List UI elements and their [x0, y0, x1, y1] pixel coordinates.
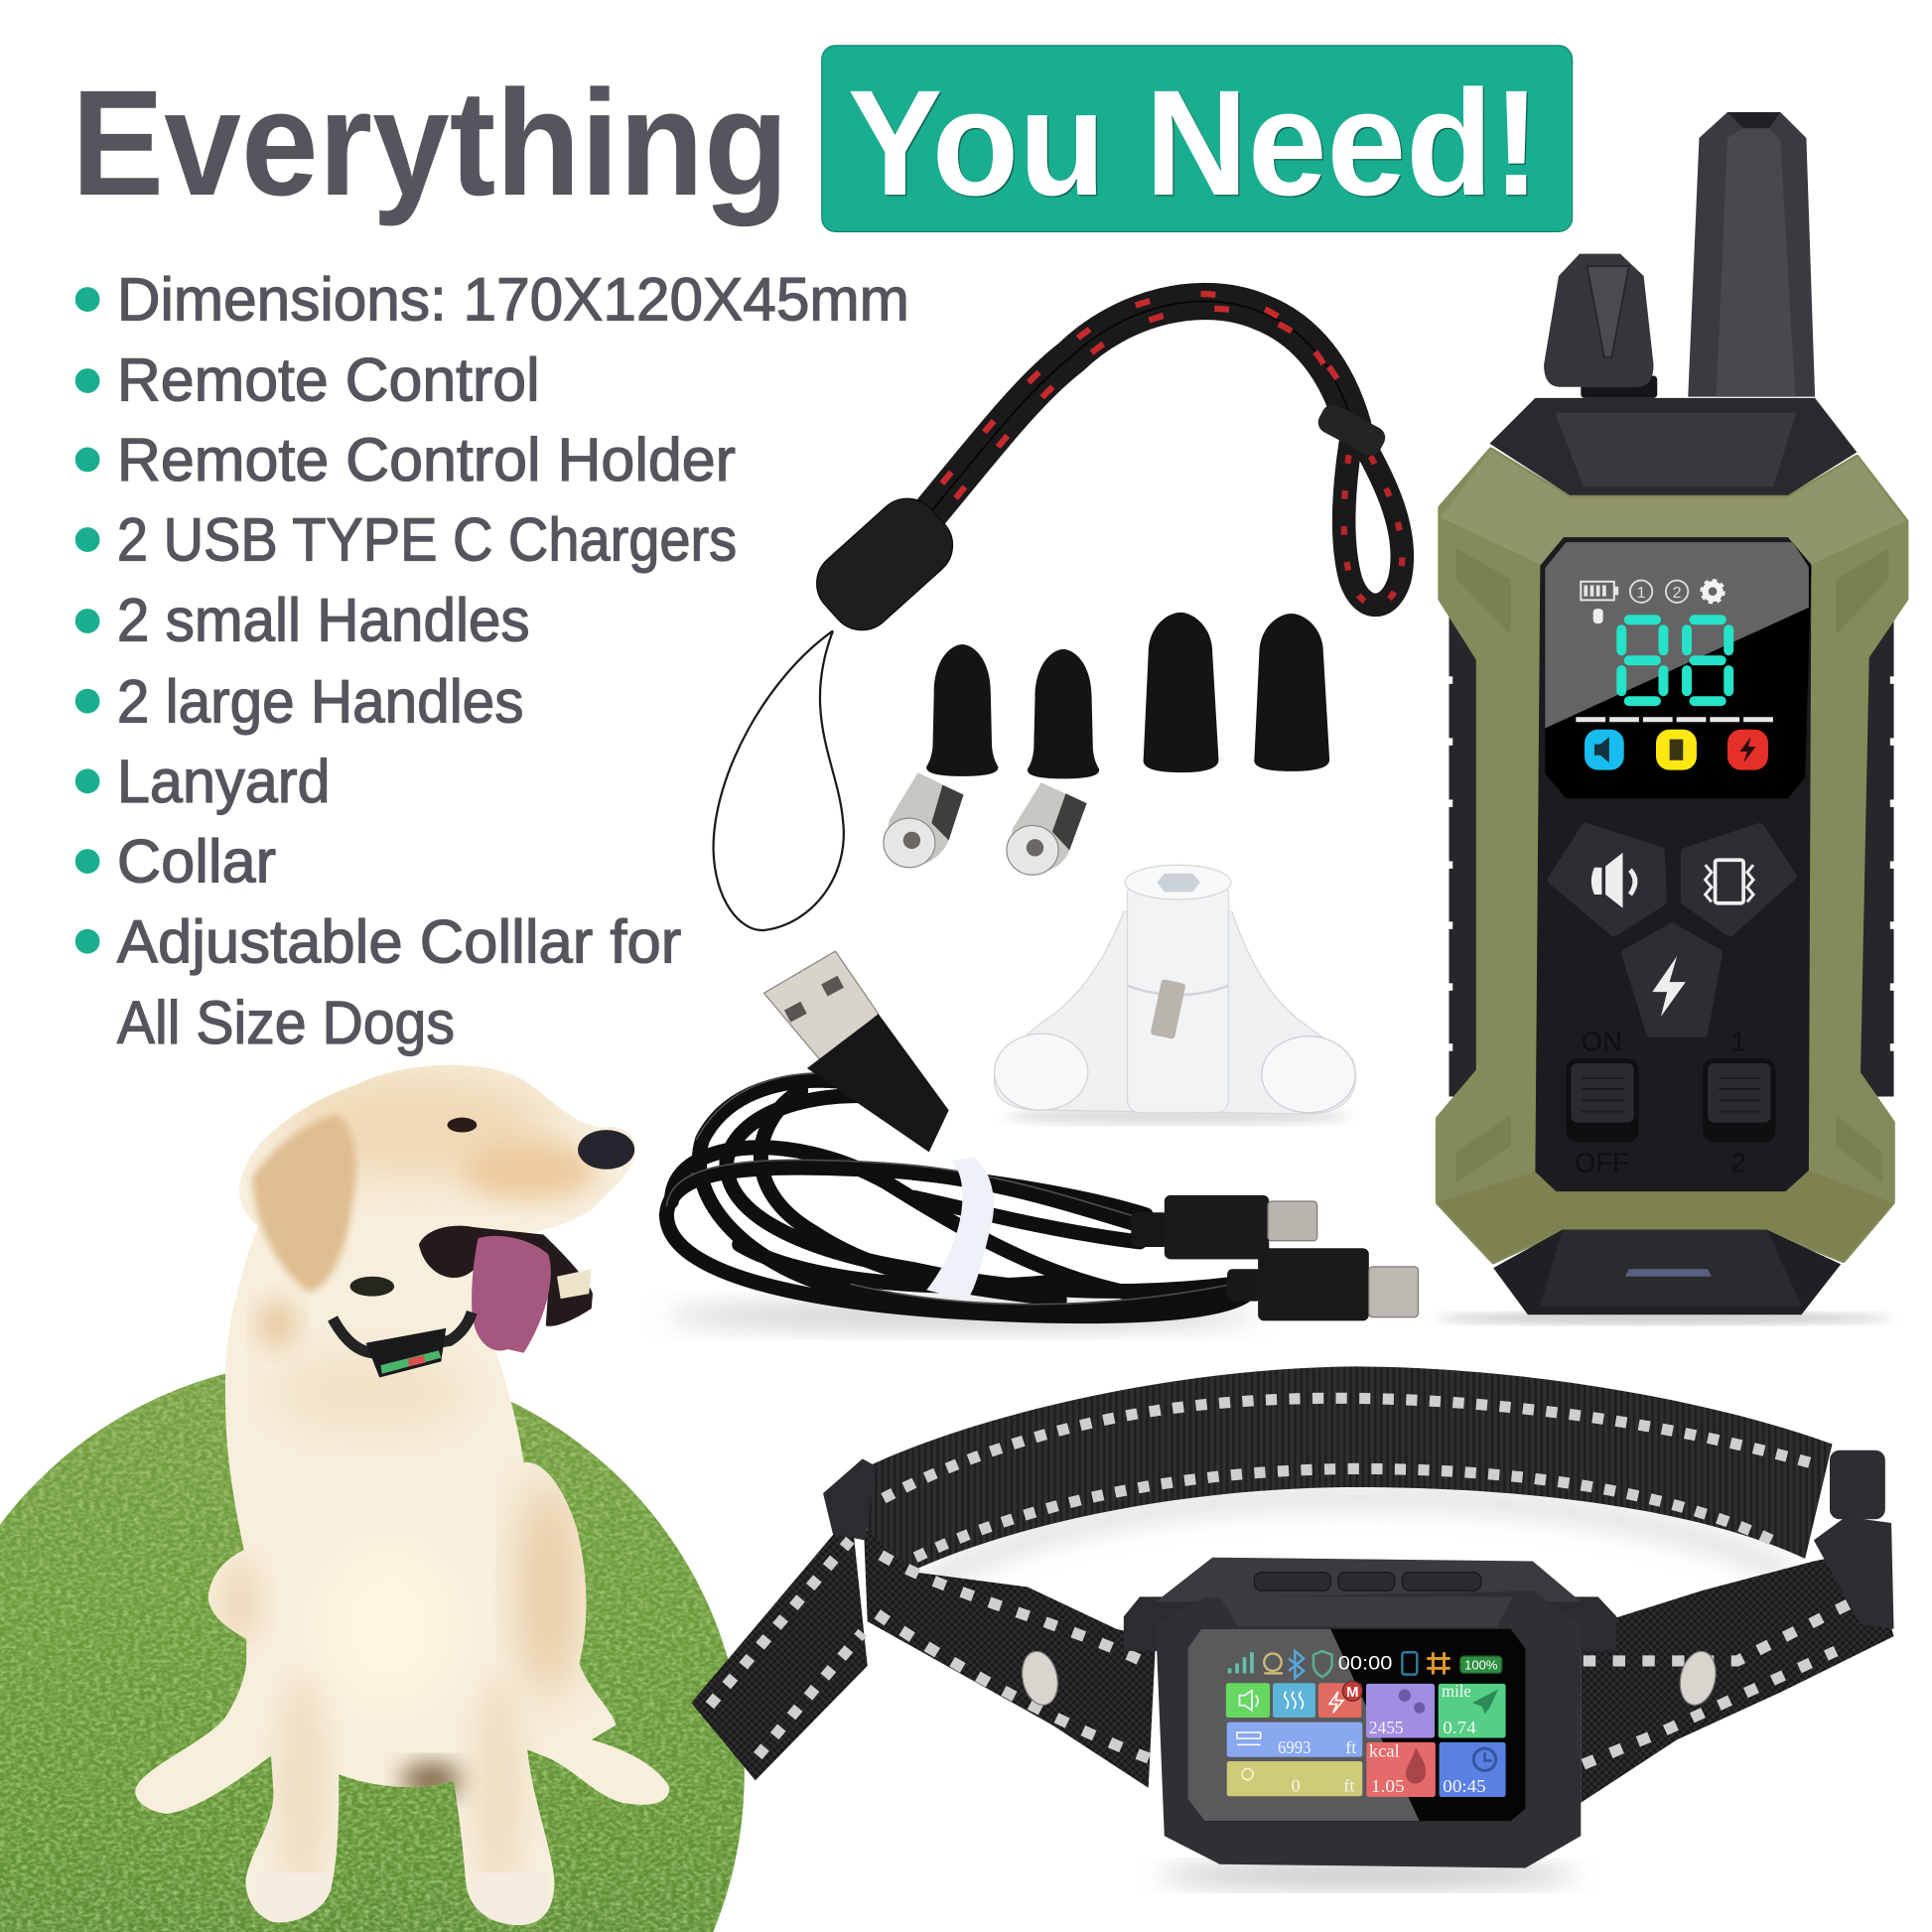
screen gloss — [1182, 1624, 1420, 1821]
tile: calories — [1366, 1740, 1436, 1797]
tile: range — [1227, 1723, 1362, 1757]
dial knob — [1544, 254, 1657, 398]
top buttons — [1254, 1573, 1481, 1590]
USB-C plug 2 — [1227, 1248, 1418, 1320]
contents list — [75, 266, 909, 1056]
channel 2 icon — [1666, 581, 1688, 603]
shield icon — [1313, 1651, 1332, 1677]
top housing — [1156, 1558, 1581, 1601]
vibrate button — [1686, 828, 1792, 931]
grass circle — [0, 1360, 745, 1932]
tile: calories: 1.05 — [1371, 1776, 1405, 1796]
contents list: Lanyard — [117, 748, 331, 815]
remote shadow — [1436, 1312, 1891, 1324]
dog teeth — [557, 1269, 592, 1299]
dog mouth — [419, 1226, 593, 1326]
contents list: Adjustable Colllar for — [117, 907, 681, 975]
channel switch: 1 — [1731, 1027, 1746, 1057]
antenna — [1688, 112, 1815, 397]
contents list: Remote Control — [117, 345, 540, 413]
channel 1 icon — [1630, 581, 1652, 603]
lanyard tag — [803, 485, 966, 643]
dog collar — [333, 1312, 472, 1378]
left buckle — [823, 1458, 876, 1540]
dog collar product — [691, 1366, 1894, 1886]
remote control holder — [994, 865, 1355, 1125]
LCD screen — [1545, 542, 1811, 798]
dog nose — [578, 1130, 634, 1170]
88 seven-segment display — [1621, 620, 1728, 701]
power switch — [1566, 1027, 1639, 1177]
shock button — [1626, 928, 1718, 1033]
tile: timer — [1440, 1742, 1506, 1797]
silicone handles: 2 small, 2 large — [926, 613, 1329, 778]
tile: distance: mile — [1442, 1681, 1471, 1701]
screen gloss — [1545, 542, 1809, 728]
black faceplate — [1535, 537, 1811, 1191]
battery 100% — [1460, 1656, 1502, 1673]
tile: range: 6993 — [1278, 1737, 1311, 1757]
battery icon — [1581, 582, 1616, 600]
dog ear — [252, 1115, 356, 1292]
power switch: OFF — [1575, 1147, 1629, 1177]
top cap — [1489, 398, 1857, 495]
contents list: 2 large Handles — [117, 667, 523, 735]
channel switch: 2 — [1731, 1147, 1746, 1177]
device body — [1156, 1590, 1581, 1867]
mode icon: vibrate — [1656, 730, 1697, 770]
tile: timer: 00:45 — [1443, 1776, 1486, 1796]
contents list: Remote Control Holder — [117, 426, 736, 493]
location icon — [1264, 1654, 1283, 1673]
cable coils — [666, 1080, 1244, 1316]
metal nuts — [884, 772, 1087, 875]
USB-C plug 1 — [1131, 1195, 1317, 1259]
tile: steps: 2455 — [1369, 1718, 1404, 1737]
mode icon: shock — [1727, 730, 1768, 770]
cable tie — [926, 1157, 994, 1300]
right strap — [1581, 1550, 1894, 1803]
golden retriever photo — [135, 1065, 669, 1928]
side grips — [1447, 604, 1896, 1097]
olive body shell — [1438, 450, 1906, 1262]
channel 1 icon: 1 — [1637, 584, 1646, 602]
device shadow — [1159, 1864, 1578, 1886]
tile: steps — [1366, 1684, 1435, 1738]
tile: distance — [1439, 1681, 1506, 1738]
side lugs — [1124, 1596, 1616, 1651]
contents list: 2 USB TYPE C Chargers — [117, 506, 737, 574]
lanyard slider — [1314, 401, 1389, 460]
USB-A plug — [763, 951, 879, 1062]
device screen — [1182, 1624, 1525, 1821]
tile: distance: 0.74 — [1443, 1718, 1476, 1737]
left strap — [864, 1528, 1156, 1788]
collar device — [1124, 1558, 1616, 1867]
mode icon: sound — [1585, 730, 1624, 770]
tile: location: ft — [1343, 1776, 1354, 1796]
back strap — [863, 1366, 1832, 1571]
loose strap end — [691, 1513, 868, 1780]
contents list: All Size Dogs — [117, 989, 455, 1056]
settings gear icon — [1702, 581, 1724, 603]
contents list: 2 small Handles — [117, 586, 530, 653]
contents list: Collar — [117, 828, 276, 896]
tile: location: 0 — [1292, 1776, 1301, 1796]
bottom cap — [1493, 1230, 1841, 1314]
clock readout: 00:00 — [1338, 1653, 1392, 1675]
right snap — [1676, 1648, 1721, 1709]
tile: sound — [1226, 1683, 1270, 1718]
lanyard — [714, 294, 1402, 930]
indicator light — [1625, 1269, 1712, 1277]
bluetooth icon — [1289, 1651, 1304, 1678]
dog eye — [448, 1118, 477, 1133]
collar shadow — [918, 1497, 1787, 1589]
channel switch — [1703, 1027, 1775, 1177]
level bar — [1576, 718, 1775, 722]
tile: vibrate — [1273, 1683, 1315, 1718]
heading: Everything: Everything — [71, 60, 788, 227]
tile: shock — [1318, 1681, 1362, 1718]
power switch: ON — [1582, 1027, 1622, 1057]
speaker button — [1553, 828, 1662, 931]
back strap stitching — [884, 1398, 1814, 1558]
tile: shock: M — [1346, 1685, 1359, 1701]
channel 2 icon: 2 — [1673, 584, 1682, 602]
tile: calories: kcal — [1369, 1740, 1400, 1760]
contents list: Dimensions: 170X120X45mm — [117, 266, 909, 334]
heading badge: You Need!: You Need! — [848, 60, 1540, 227]
USB cable — [665, 951, 1418, 1330]
signal icon — [1230, 1652, 1252, 1673]
dog tongue — [472, 1236, 551, 1353]
remote icon — [1402, 1652, 1417, 1675]
battery 100%: 100% — [1464, 1658, 1498, 1673]
tile: range: ft — [1345, 1737, 1356, 1757]
neck mark — [349, 1277, 394, 1297]
tile: location — [1227, 1761, 1362, 1796]
fence icon — [1427, 1652, 1450, 1675]
left snap — [1018, 1648, 1062, 1709]
remote control — [1436, 112, 1906, 1324]
lock icon — [1593, 609, 1603, 623]
right buckle — [1814, 1450, 1894, 1629]
